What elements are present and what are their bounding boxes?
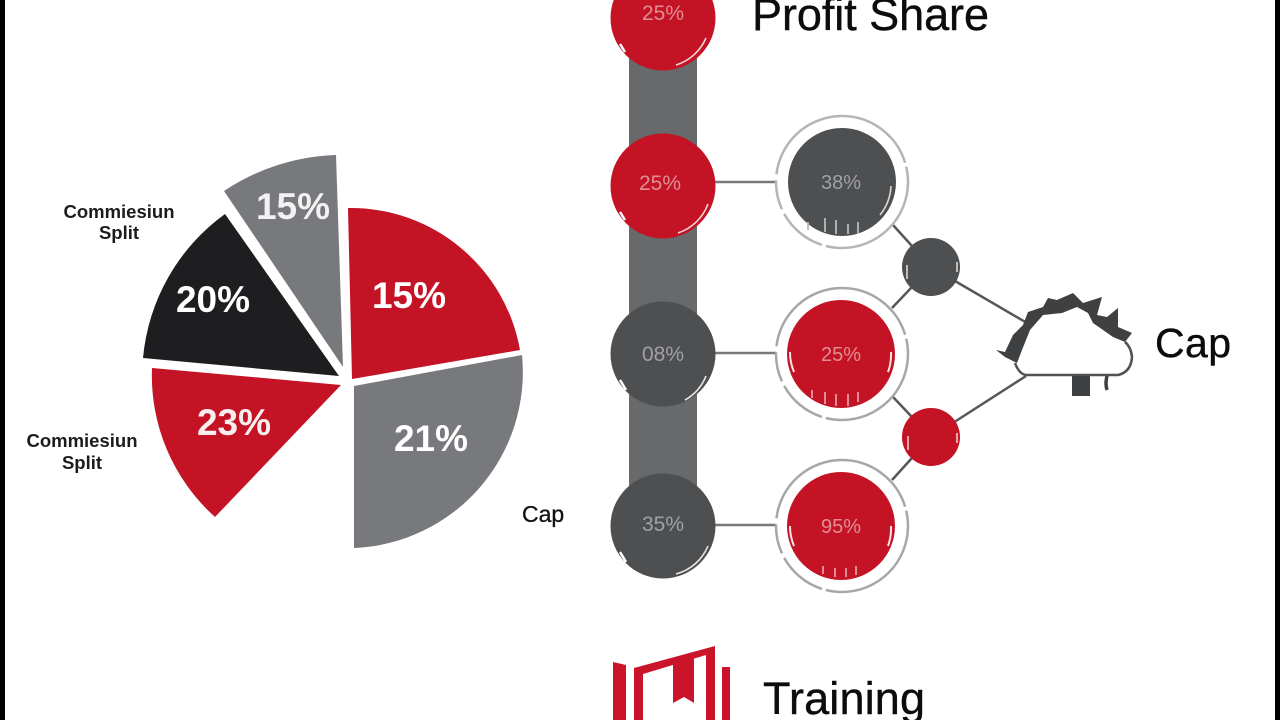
label: commission split upper: Split (99, 222, 139, 243)
ring circle: dark top (776, 116, 908, 248)
circle: dark fourth: 35% (642, 513, 684, 536)
vertical gray column (629, 50, 697, 500)
circle: dark third (610, 302, 716, 406)
circle: red top: 25% (642, 2, 684, 25)
ring circle: dark top: 38% (821, 172, 861, 194)
ring circle: red bottom (776, 460, 908, 592)
pie chart (143, 155, 523, 548)
label: commission split upper: Commiesiun (63, 201, 175, 222)
ring circle: red middle (776, 288, 908, 420)
slice: red 15% (348, 208, 520, 379)
circle: dark fourth (610, 474, 716, 578)
slice: red 23%: 23% (197, 402, 271, 443)
left column circles (610, 0, 716, 578)
slice: gray 21% (354, 355, 523, 548)
icon: book with bookmark (613, 646, 730, 720)
right column ringed circles (776, 116, 908, 592)
circle: red second (610, 134, 716, 238)
ring circle: red middle: 25% (821, 344, 861, 366)
slice: gray 21%: 21% (394, 418, 468, 459)
label: commission split lower: Split (62, 452, 102, 473)
heading: cap: Cap (1155, 320, 1231, 366)
slice: red 15%: 15% (372, 275, 446, 316)
circle: dark third: 08% (642, 343, 684, 366)
slice: gray 15% (224, 155, 343, 367)
connector lines (715, 182, 1027, 525)
label: commission split lower: Commiesiun (26, 430, 138, 451)
icon: cloud with spiky top (996, 293, 1132, 396)
slice: black 20% (143, 214, 339, 376)
node: dark (902, 238, 960, 296)
circle: red top (610, 0, 716, 70)
slice: black 20%: 20% (176, 279, 250, 320)
slice: gray 15%: 15% (256, 186, 330, 227)
slice: red 23% (152, 368, 341, 517)
node: red (902, 408, 960, 466)
label: cap small: Cap (522, 501, 564, 527)
ring circle: red bottom: 95% (821, 516, 861, 538)
circle: red second: 25% (639, 172, 681, 195)
